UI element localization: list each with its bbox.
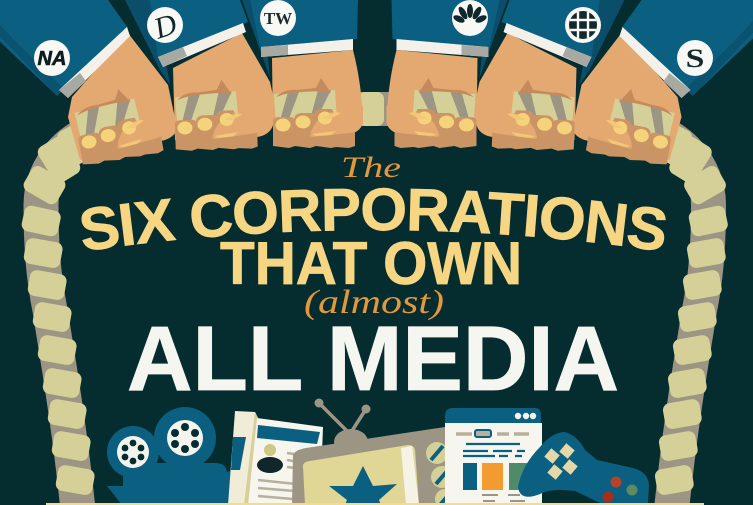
icon: film projector <box>107 407 252 505</box>
icon: web browser <box>445 408 542 505</box>
rope: right side <box>644 120 729 505</box>
title: almost: (almost) <box>304 284 444 321</box>
rope: left side <box>20 120 105 505</box>
logo: TW: TW <box>264 9 292 28</box>
logo: S <box>677 40 713 76</box>
icon: game controller <box>518 432 649 503</box>
logo: NA: NA <box>38 48 66 70</box>
icon: newspaper <box>228 411 323 505</box>
logo: NA <box>34 40 70 76</box>
logo: S: S <box>686 44 704 73</box>
logo: TW <box>260 0 296 36</box>
icon: television <box>292 398 470 505</box>
rope: top span between hands <box>350 92 400 126</box>
title: all media: ALL MEDIA <box>127 308 619 410</box>
logo: D: D <box>149 7 181 46</box>
logo: grid <box>565 7 601 43</box>
hands: left three gripping rope <box>0 0 363 166</box>
title: six corporations: SIX CORPORATIONS <box>82 188 666 250</box>
title: that own: THAT OWN <box>220 230 522 297</box>
bottom yellow strip <box>46 503 704 505</box>
hands: right three gripping rope <box>386 0 753 166</box>
title: The: The <box>341 151 401 184</box>
logo: peacock <box>452 0 488 36</box>
